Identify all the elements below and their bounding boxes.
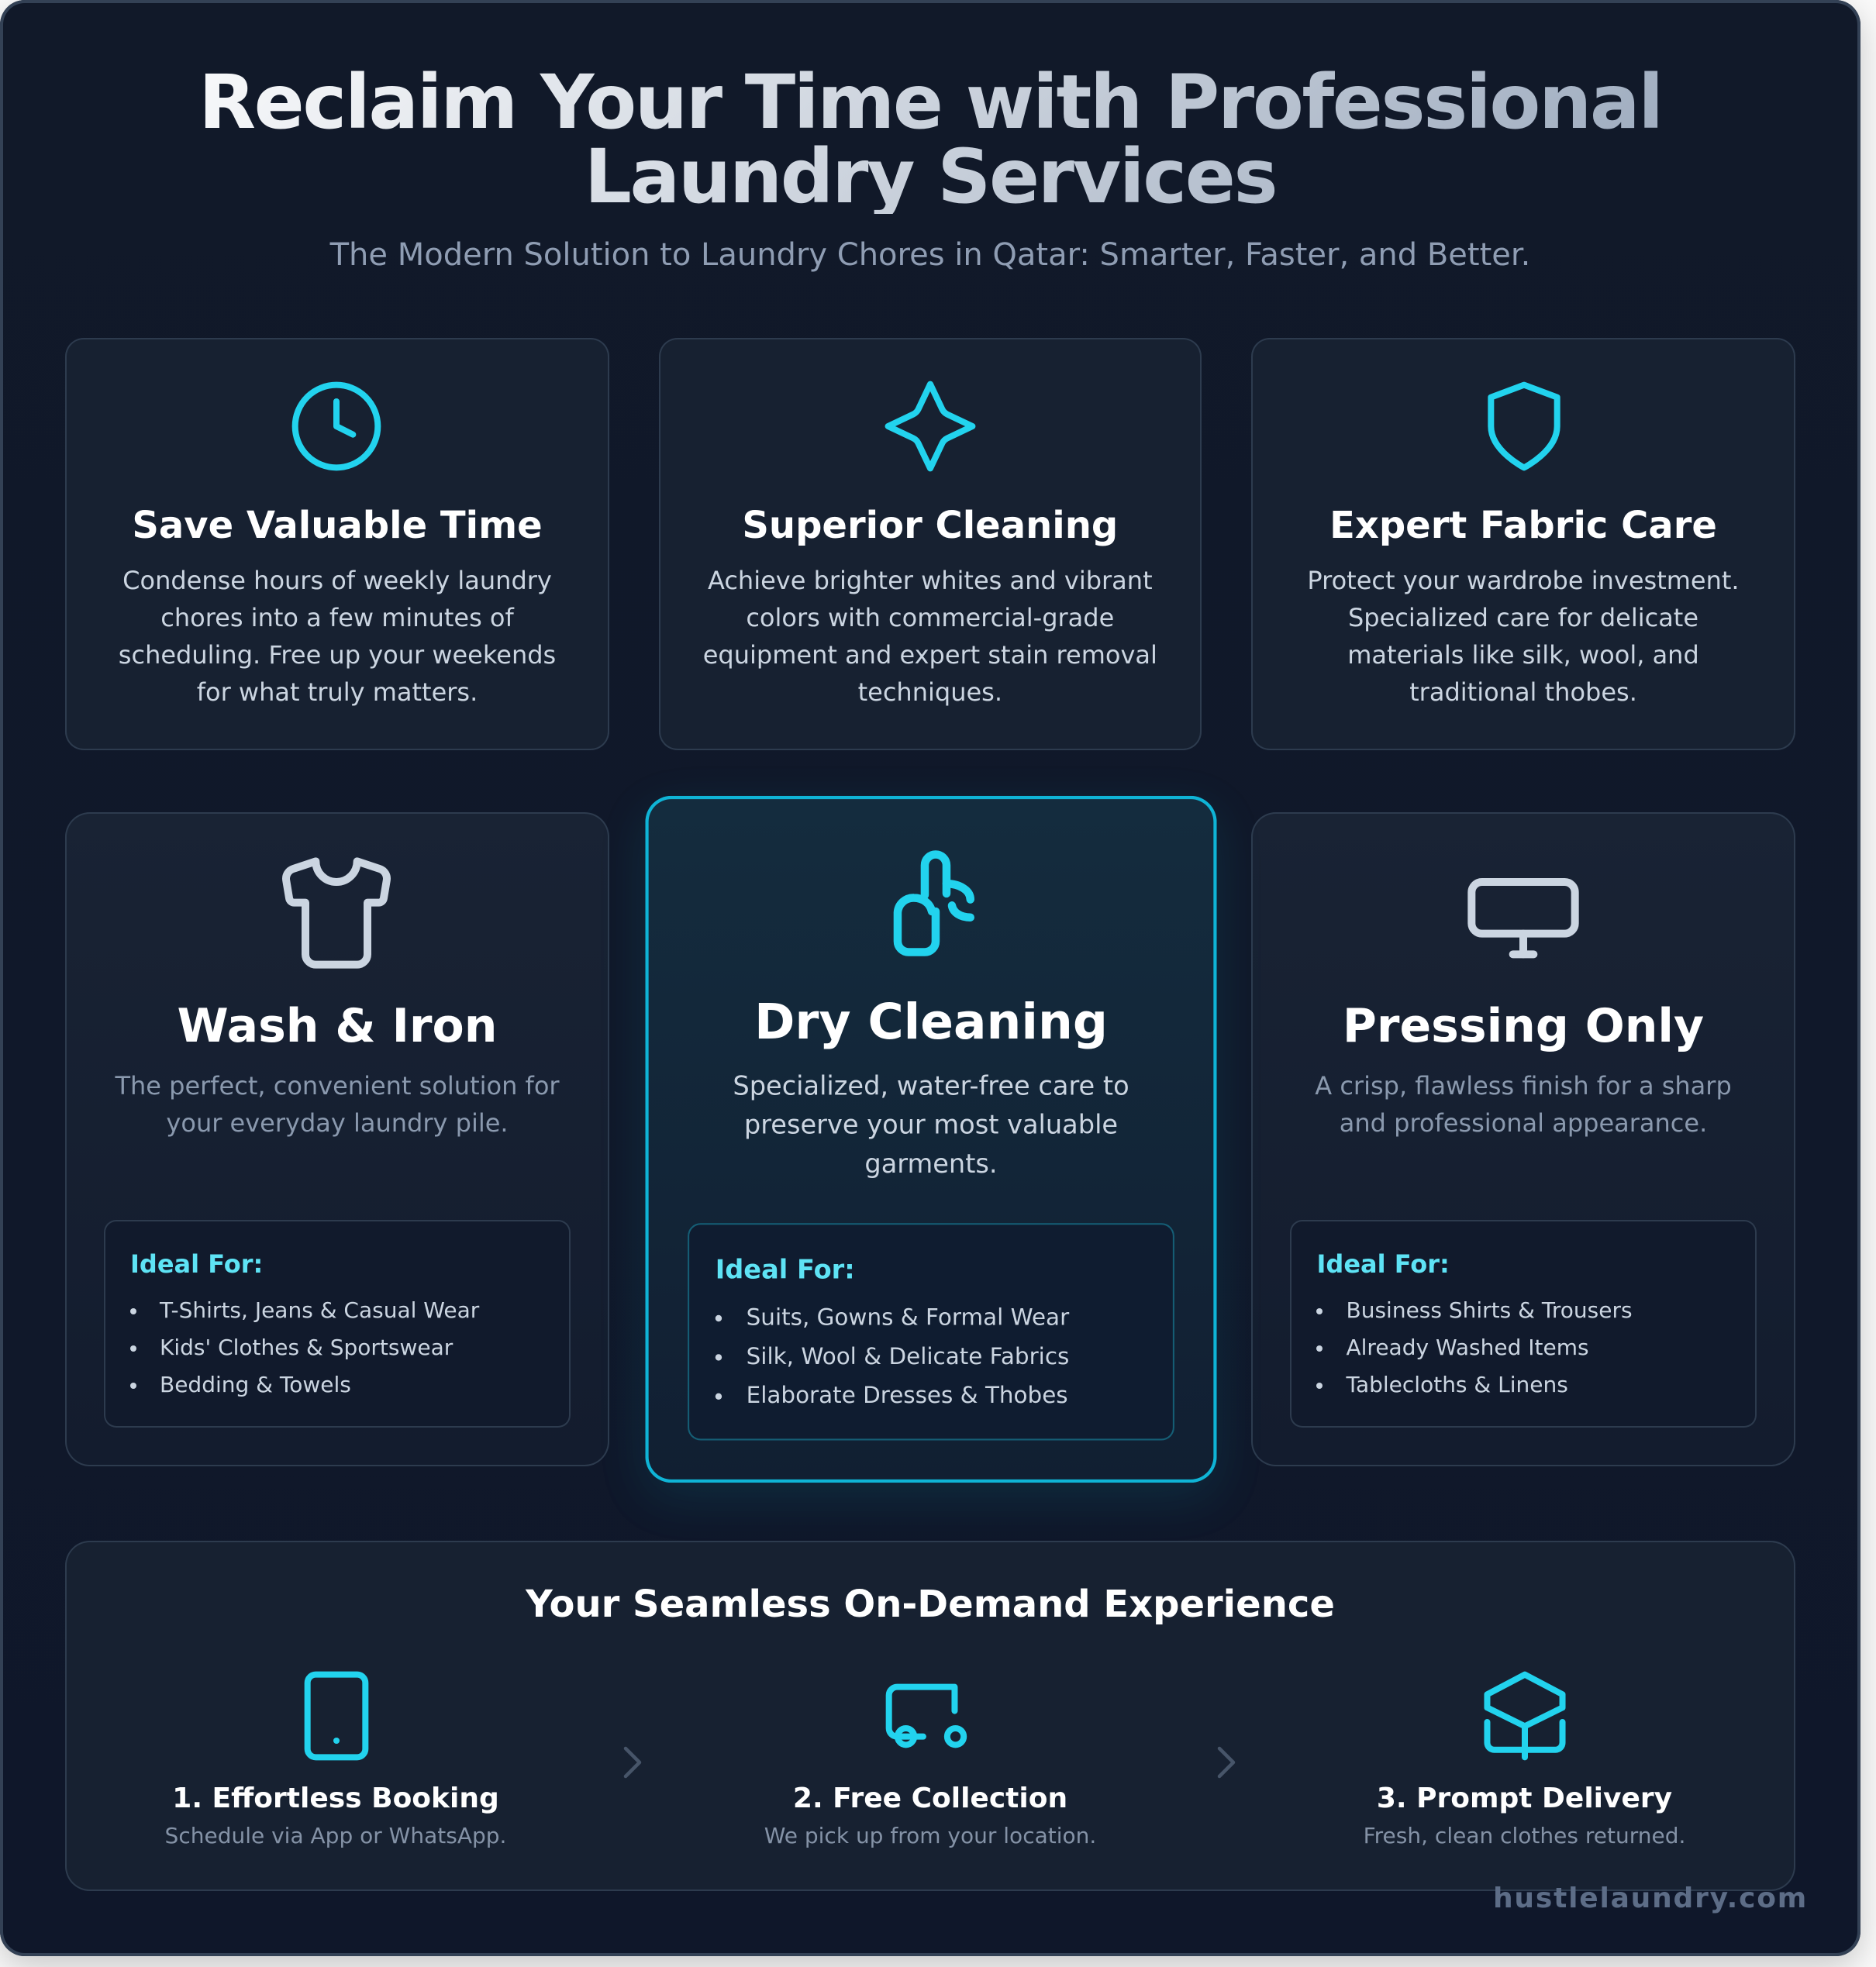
icon: sparkle [885,381,975,471]
list item: Silk, Wool & Delicate Fabrics [747,1342,1069,1369]
list item: T-Shirts, Jeans & Casual Wear [160,1297,479,1323]
description: for what truly matters. [197,677,478,707]
description [1315,1071,1732,1138]
panel: save valuable time [65,338,609,750]
list item: Already Washed Items [1346,1335,1589,1360]
ideal for label: Ideal For: [1316,1249,1450,1279]
step 2 [764,1683,1096,1848]
heading: Pressing Only [1343,999,1704,1053]
description: scheduling. Free up your weekends [119,640,556,670]
description: techniques. [858,677,1002,707]
description: your everyday laundry pile. [166,1108,509,1138]
step title: 2. Free Collection [793,1783,1067,1814]
icon: shirt [282,857,391,969]
list item: Bedding & Towels [160,1372,351,1397]
section heading: Your Seamless On-Demand Experience [526,1583,1335,1626]
heading: Wash & Iron [178,999,497,1053]
description [703,566,1157,707]
list item: Kids' Clothes & Sportswear [160,1335,453,1360]
title [65,65,1795,214]
panel: pressing only [1251,812,1795,1466]
description: Protect your wardrobe investment. [1307,566,1740,595]
list item: Business Shirts & Trousers [1346,1297,1633,1323]
description: equipment and expert stain removal [703,640,1157,670]
arrow [1217,1747,1236,1778]
panel: on-demand experience [65,1541,1795,1891]
description: The perfect, convenient solution for [115,1071,560,1101]
arrow [623,1747,642,1778]
step description: Fresh, clean clothes returned. [1364,1823,1685,1848]
title: Reclaim Your Time with Professional [198,59,1662,146]
step description: Schedule via App or WhatsApp. [165,1823,506,1848]
list item: Tablecloths & Linens [1346,1372,1568,1397]
description: preserve your most valuable [744,1109,1118,1140]
step 3 [1364,1671,1685,1848]
panel: wash and iron [65,812,609,1466]
icon: clock [291,381,381,471]
panel: superior cleaning [659,338,1202,750]
ideal for box [104,1220,571,1428]
description: traditional thobes. [1409,677,1637,707]
icon: truck [885,1683,967,1748]
description [1307,566,1740,707]
description [115,1071,560,1138]
watermark: hustlelaundry.com [1493,1883,1808,1914]
description: A crisp, flawless finish for a sharp [1315,1071,1732,1101]
heading: Expert Fabric Care [1329,504,1717,547]
title: Laundry Services [585,133,1276,220]
step description: We pick up from your location. [764,1823,1096,1848]
heading: Superior Cleaning [742,504,1118,547]
step 1 [165,1671,506,1848]
ideal for label: Ideal For: [716,1254,855,1285]
step title: 1. Effortless Booking [172,1783,499,1814]
description [733,1070,1129,1179]
description: Specialized care for delicate [1348,603,1698,632]
description: chores into a few minutes of [160,603,514,632]
subtitle: The Modern Solution to Laundry Chores in Qatar: Smarter, Faster, and Better. [330,237,1530,273]
heading: Dry Cleaning [754,994,1108,1051]
icon: monitor [1467,878,1579,958]
icon: smartphone [304,1671,369,1761]
description: Specialized, water-free care to [733,1070,1129,1101]
panel: dry cleaning featured [645,796,1217,1483]
description: colors with commercial-grade [746,603,1114,632]
ideal for box [1290,1220,1757,1428]
icon: shield [1488,381,1560,471]
description: and professional appearance. [1340,1108,1707,1138]
description: Achieve brighter whites and vibrant [708,566,1153,595]
description [119,566,556,707]
description: garments. [864,1149,998,1179]
step title: 3. Prompt Delivery [1377,1783,1672,1814]
ideal for label: Ideal For: [130,1249,263,1279]
list item: Suits, Gowns & Formal Wear [747,1304,1069,1331]
panel: expert fabric care [1251,338,1795,750]
ideal for box [688,1223,1174,1440]
description: Condense hours of weekly laundry [122,566,552,595]
icon: dry cleaning hand [893,850,974,956]
heading: Save Valuable Time [132,504,543,547]
icon: package [1484,1671,1566,1761]
list item: Elaborate Dresses & Thobes [747,1382,1068,1409]
description: materials like silk, wool, and [1347,640,1699,670]
